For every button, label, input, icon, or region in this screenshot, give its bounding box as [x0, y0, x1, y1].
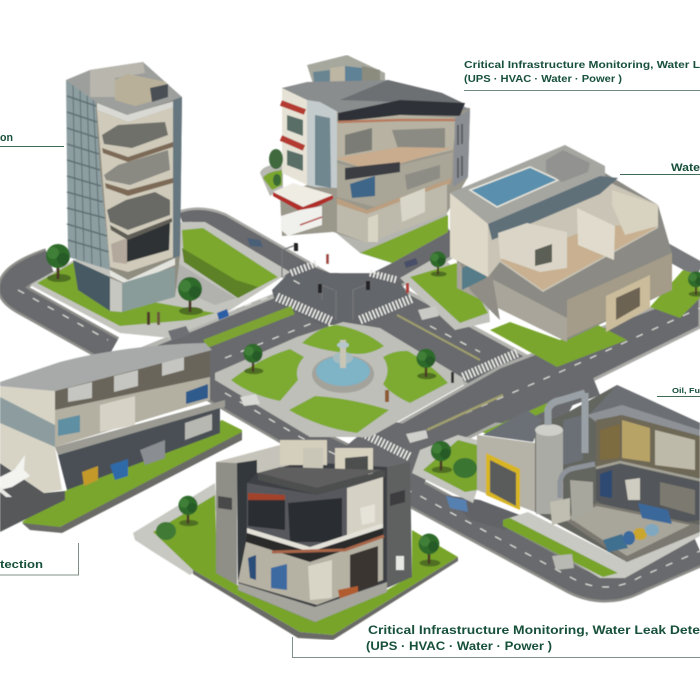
hospital glass pillar [307, 97, 337, 188]
trees around tower [46, 244, 203, 315]
plant tree [431, 441, 477, 478]
airport upper floor [55, 350, 210, 447]
label: top left: on [0, 132, 13, 144]
ambulance [281, 206, 322, 236]
floor slab [247, 523, 383, 552]
museum building [450, 145, 672, 342]
crosswalks [277, 263, 517, 457]
label: bottom: Critical Infrastructure Monitoring, Water Leak Dete [368, 625, 700, 637]
ducts and tanks [563, 415, 583, 465]
sign post [396, 556, 404, 570]
hospital rooftop plant [307, 55, 385, 90]
forecourt in front of hospital [288, 232, 392, 273]
base slab [238, 582, 387, 622]
data centre site [133, 483, 458, 640]
plant site [412, 403, 700, 578]
road network [12, 221, 700, 587]
label: lower left: tection [0, 559, 43, 571]
interior backdrop [237, 458, 387, 622]
plant building [477, 385, 700, 562]
concrete loading block [477, 435, 535, 512]
plaza lawns [302, 325, 384, 354]
tower roof [66, 62, 182, 116]
hospital canopy [273, 183, 333, 207]
fountain [312, 340, 374, 393]
vehicles [168, 238, 574, 570]
interior upper floor [247, 477, 383, 547]
road medians [205, 310, 503, 430]
airport lawn strip [22, 420, 242, 527]
tower interior floors [97, 107, 173, 272]
tower building [66, 62, 182, 312]
interior lower floor [238, 537, 383, 605]
factory cutaway upper floor [596, 415, 700, 478]
hospital white facade [282, 87, 307, 185]
label: lower right: Oil, Fu [672, 386, 700, 395]
airport building [0, 343, 242, 533]
roof units [280, 440, 327, 465]
museum basement [457, 262, 567, 342]
hospital dark roof [282, 80, 470, 113]
traffic lights and pedestrians [147, 243, 454, 402]
label: right: Wate [671, 162, 700, 174]
label: bottom: (UPS · HVAC · Water · Power ) [366, 641, 552, 653]
silo [536, 430, 563, 514]
label: top right [464, 60, 700, 91]
hospital site [260, 163, 448, 263]
factory backdrop [535, 385, 700, 562]
data centre trees [156, 496, 440, 566]
left concrete tower [216, 445, 290, 473]
data centre building [216, 440, 412, 622]
tower interior backdrop [92, 92, 182, 311]
plaza paving [215, 322, 463, 437]
airport roof [0, 343, 212, 391]
museum site [400, 255, 700, 367]
airplane [0, 455, 30, 490]
tower glass facade [66, 80, 110, 270]
label: bottom [292, 625, 700, 658]
museum interior backdrop [450, 170, 672, 340]
label: lower right [657, 386, 700, 397]
museum front wall [567, 253, 672, 338]
plaza trees [243, 344, 263, 374]
label: top right: Critical Infrastructure Monitoring, Water L [464, 60, 700, 71]
hospital interior backdrop [280, 95, 470, 243]
yellow door [486, 453, 520, 510]
hospital cutaway interior [337, 115, 457, 170]
central plaza [215, 322, 463, 437]
road lane markings [18, 222, 700, 587]
hospital forecourt tree [269, 149, 283, 186]
factory lower floor [596, 464, 700, 530]
factory back wall and roof [587, 385, 700, 432]
hospital right facade [453, 110, 470, 187]
label: top right: (UPS · HVAC · Water · Power ) [464, 74, 622, 85]
airport apron [0, 463, 65, 532]
label: lower left [0, 543, 78, 575]
airport lower floor [58, 408, 220, 490]
hospital building [273, 55, 470, 243]
museum interior [488, 178, 658, 292]
right concrete column [387, 462, 412, 588]
tower block site [30, 222, 290, 338]
label: top left [0, 132, 64, 147]
airport left wall [0, 386, 62, 493]
tower base [73, 260, 110, 311]
museum roof [450, 145, 605, 224]
museum tree [430, 251, 700, 297]
turbines [603, 534, 628, 552]
label: right [620, 162, 700, 175]
museum left face [450, 193, 488, 277]
factory floor slab [560, 503, 700, 562]
top slab [258, 467, 383, 488]
